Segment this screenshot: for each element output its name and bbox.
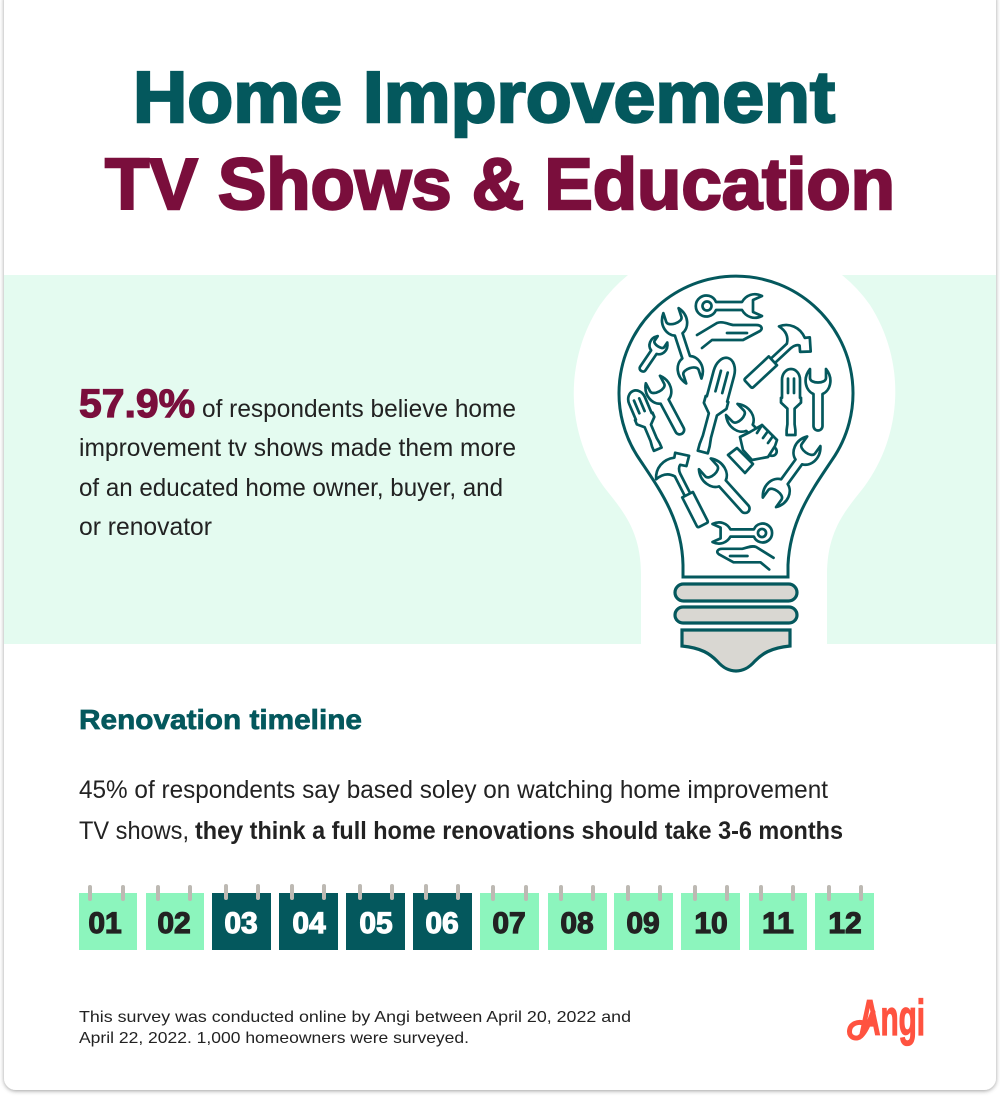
text block: timeline statistic: 45% of respondents say based soley on watching home improvement [79, 776, 828, 804]
long double wrench [659, 307, 706, 385]
statistic text: of respondents believe home [202, 395, 516, 423]
right wrench [806, 369, 830, 430]
lower wrench [696, 456, 757, 520]
survey footnote [79, 1009, 631, 1047]
ring wrench bottom [712, 522, 772, 544]
lower right wrench [759, 434, 824, 510]
bulb base [675, 584, 797, 671]
month 11 [749, 885, 807, 950]
statistic text: of an educated home owner, buyer, and [79, 474, 503, 502]
fist [740, 425, 777, 460]
bulb glass outline [619, 276, 853, 577]
month 11: 11 [762, 907, 794, 940]
statistic text: or renovator [79, 513, 212, 541]
left screwdriver [624, 387, 666, 453]
cuff [728, 448, 753, 473]
tools [624, 294, 830, 570]
bulb white halo [574, 275, 895, 644]
icon: light bulb filled with tools [619, 276, 853, 671]
month 04 [279, 884, 338, 950]
calendar months row [79, 884, 874, 950]
ring wrench top [696, 294, 762, 318]
logo: Angi [849, 990, 925, 1046]
left wrench [642, 374, 693, 440]
month 01 [79, 885, 137, 950]
month 12 [815, 885, 874, 950]
large screwdriver [692, 355, 739, 455]
text block: timeline statistic: TV shows, [79, 817, 189, 845]
month 02 [146, 885, 204, 950]
month 05: 05 [359, 907, 393, 940]
open hand top [697, 322, 762, 348]
wrench held in fist [723, 401, 784, 463]
title [105, 58, 895, 225]
statistic text: improvement tv shows made them more [79, 434, 516, 462]
lower hammer [649, 448, 720, 535]
open hand bottom [717, 546, 774, 570]
statistic text: 57.9% [79, 382, 195, 426]
month 01: 01 [88, 907, 122, 940]
month 09 [614, 885, 673, 950]
month 02: 02 [157, 907, 191, 940]
month 05 [346, 884, 405, 950]
month 07 [480, 885, 539, 950]
logo: Angi: Angi [859, 990, 925, 1046]
panel: education statistic band [4, 275, 996, 644]
survey footnote: April 22, 2022. 1,000 homeowners were surveyed. [79, 1030, 469, 1047]
heading: renovation timeline: Renovation timeline [79, 704, 362, 735]
right screwdriver [781, 369, 801, 435]
title: TV Shows & Education [105, 145, 895, 225]
month 07: 07 [492, 907, 526, 940]
month 03: 03 [224, 907, 258, 940]
small wrench [634, 334, 670, 376]
survey footnote: This survey was conducted online by Angi between April 20, 2022 and [79, 1009, 631, 1026]
month 03 [212, 884, 271, 950]
text block: timeline statistic [79, 776, 843, 845]
statistic text [79, 382, 516, 541]
month 08: 08 [560, 907, 594, 940]
month 04: 04 [292, 907, 326, 940]
month 06: 06 [425, 907, 459, 940]
text block: timeline statistic: they think a full home renovations should take 3-6 months [195, 817, 843, 845]
title: Home Improvement [133, 58, 835, 138]
month 09: 09 [626, 907, 660, 940]
month 08 [548, 885, 607, 950]
upper hammer [734, 316, 817, 398]
month 10 [681, 885, 740, 950]
month 10: 10 [694, 907, 728, 940]
month 12: 12 [828, 907, 862, 940]
month 06 [413, 884, 472, 950]
